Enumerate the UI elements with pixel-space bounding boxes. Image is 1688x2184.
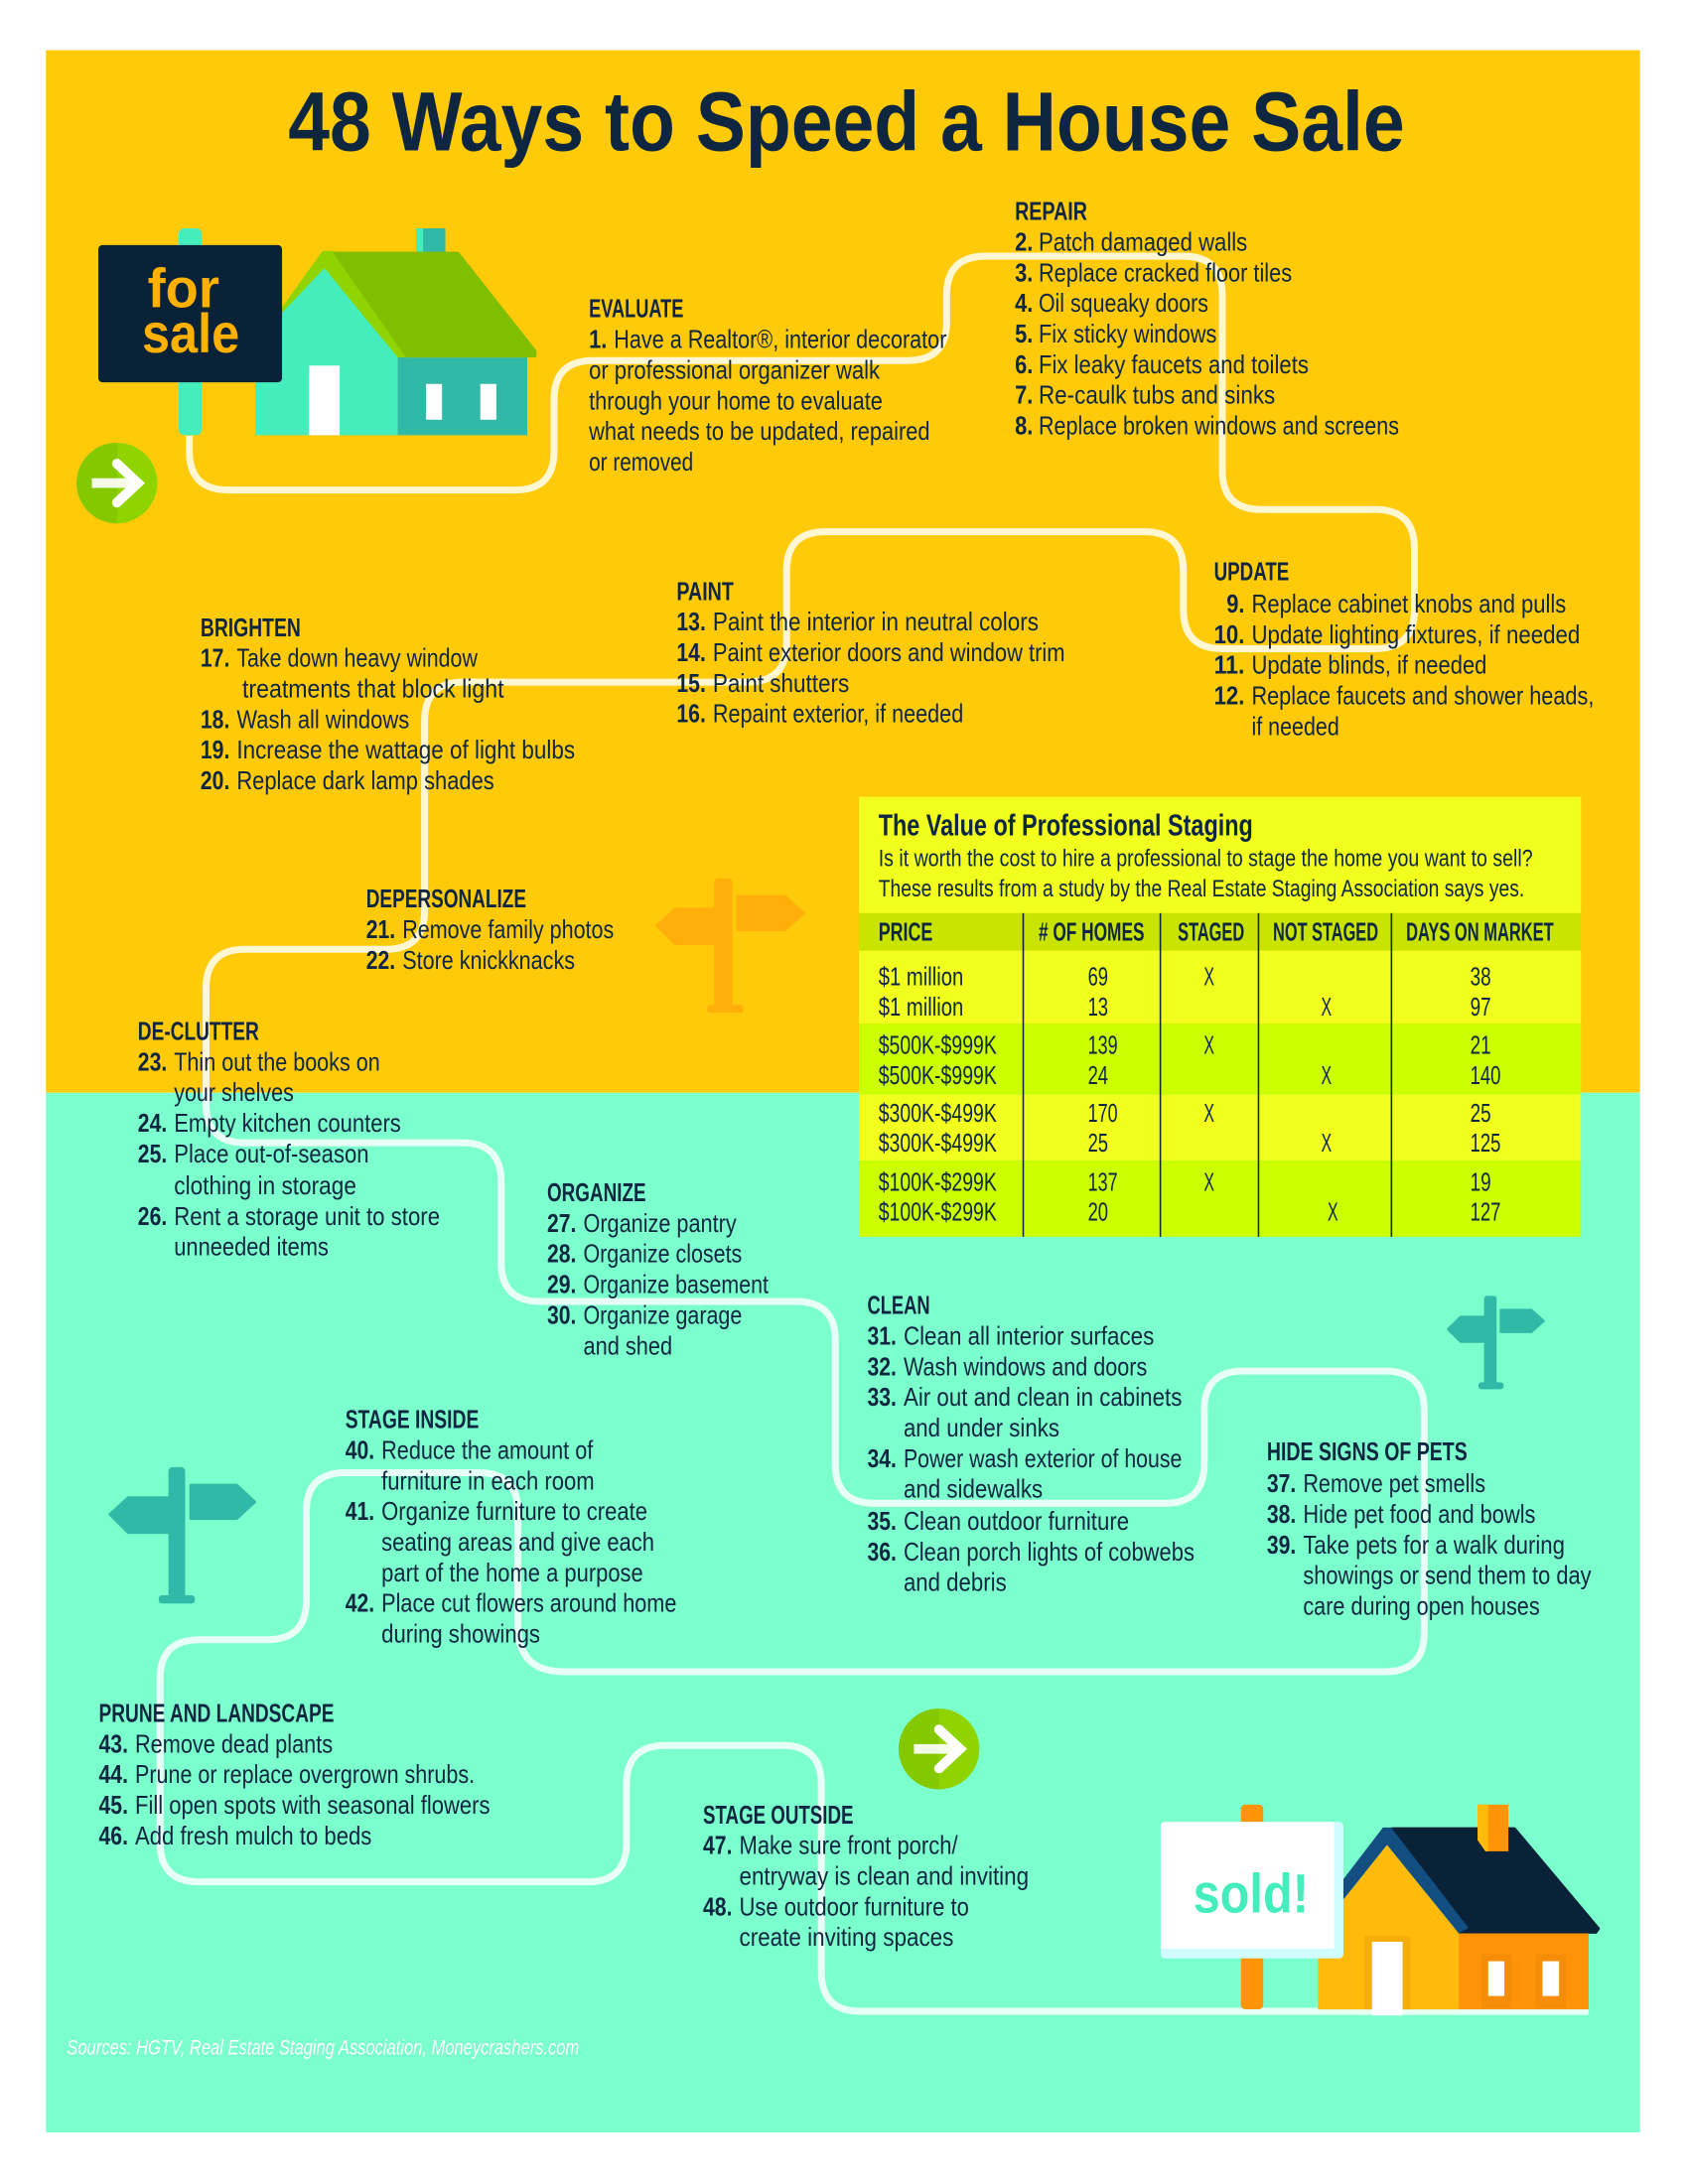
section: de-clutter: Place out-of-season (174, 1141, 369, 1168)
section: paint: Paint the interior in neutral colors (713, 609, 1039, 636)
section: update: 10. (1214, 621, 1244, 649)
section: prune and landscape (99, 1700, 491, 1850)
for sale sign: for (148, 256, 219, 319)
section: stage inside: 42. (346, 1590, 374, 1618)
panel: staging table: 20 (1088, 1198, 1108, 1226)
section: clean: Air out and clean in cabinets (904, 1384, 1182, 1412)
section: repair: Fix leaky faucets and toilets (1039, 351, 1309, 379)
section: stage outside: Use outdoor furniture to (739, 1893, 969, 1921)
section: prune and landscape: 45. (99, 1792, 128, 1820)
panel: staging table: X (1322, 994, 1332, 1022)
section: depersonalize: Store knickknacks (402, 947, 575, 975)
background: yellow upper panel (46, 51, 1640, 1093)
section: repair: Oil squeaky doors (1039, 290, 1208, 318)
section: clean: 31. (867, 1322, 897, 1350)
section: organize: 30. (547, 1301, 576, 1329)
section: stage inside: Reduce the amount of (381, 1436, 594, 1464)
section: hide signs of pets (1267, 1438, 1592, 1620)
section: repair: Patch damaged walls (1039, 228, 1247, 256)
panel: staging table: These results from a study by the Real Estate Staging Association says yes. (879, 876, 1524, 902)
section: brighten: 20. (201, 767, 229, 795)
section: prune and landscape: 44. (99, 1761, 128, 1789)
section: update: UPDATE (1214, 559, 1289, 587)
panel: staging table: X (1203, 1031, 1214, 1059)
section: de-clutter: Empty kitchen counters (174, 1110, 401, 1138)
panel: staging table: X (1322, 1062, 1332, 1090)
section: update: 12. (1214, 683, 1244, 711)
section: de-clutter: your shelves (174, 1079, 294, 1107)
section: organize: 28. (547, 1241, 576, 1269)
section: paint: 16. (676, 701, 706, 729)
panel: staging table: 139 (1088, 1031, 1118, 1059)
section: hide signs of pets: Remove pet smells (1303, 1470, 1485, 1498)
background: mint lower panel (46, 1093, 1640, 2132)
section: hide signs of pets: showings or send them to day (1303, 1563, 1592, 1590)
section: evaluate: what needs to be updated, repaired (588, 418, 930, 446)
section: clean: and under sinks (904, 1415, 1059, 1442)
panel: staging table: # OF HOMES (1039, 918, 1144, 946)
section: repair: 7. (1015, 382, 1033, 410)
section: stage inside (346, 1407, 676, 1649)
section: evaluate: 1. (589, 327, 607, 354)
panel: staging table: 170 (1088, 1100, 1118, 1128)
section: brighten: BRIGHTEN (201, 614, 301, 642)
section: repair: 4. (1015, 290, 1033, 318)
section: prune and landscape: PRUNE AND LANDSCAPE (99, 1700, 334, 1727)
panel: staging table: 13 (1088, 994, 1108, 1022)
section: hide signs of pets: 37. (1267, 1470, 1296, 1498)
panel: staging table: The Value of Professional Staging (879, 808, 1253, 843)
section: paint: 15. (676, 670, 706, 698)
panel: staging table: X (1203, 964, 1214, 992)
panel: staging table: $300K-$499K (879, 1100, 997, 1128)
section: brighten: Take down heavy window (236, 645, 478, 673)
for sale house (255, 228, 535, 435)
section: hide signs of pets: Hide pet food and bowls (1303, 1501, 1535, 1529)
section: update: 11. (1214, 652, 1244, 680)
section: clean: Power wash exterior of house (904, 1445, 1182, 1473)
section: organize: ORGANIZE (547, 1179, 646, 1207)
section: paint: 14. (676, 639, 706, 667)
panel: staging table: $1 million (879, 994, 963, 1022)
section: prune and landscape: Prune or replace overgrown shrubs. (135, 1761, 475, 1789)
section: clean: CLEAN (867, 1293, 930, 1320)
section: update: if needed (1251, 713, 1339, 741)
section: update: Replace faucets and shower heads, (1251, 683, 1594, 711)
section: stage outside: 48. (703, 1893, 732, 1921)
section: stage inside: STAGE INSIDE (346, 1407, 479, 1434)
section: brighten: Increase the wattage of light bulbs (236, 737, 575, 764)
section: clean: 33. (867, 1384, 897, 1412)
section: organize: 29. (547, 1272, 576, 1299)
section: evaluate: or removed (589, 449, 693, 477)
section: repair: 8. (1015, 413, 1033, 441)
section: de-clutter: clothing in storage (174, 1172, 356, 1200)
section: prune and landscape: 43. (99, 1730, 128, 1758)
section: organize: and shed (583, 1332, 672, 1360)
section: organize: Organize closets (583, 1241, 742, 1269)
section: repair: 6. (1015, 351, 1033, 379)
section: paint: 13. (676, 609, 706, 636)
section: prune and landscape: 46. (99, 1823, 128, 1850)
section: brighten: 19. (201, 737, 229, 764)
section: de-clutter: Thin out the books on (174, 1048, 380, 1076)
sold sign: sold! (1194, 1862, 1309, 1925)
section: de-clutter (138, 1018, 440, 1262)
winding path (160, 256, 1589, 2011)
panel: staging table: 97 (1471, 994, 1491, 1022)
section: organize: Organize basement (583, 1272, 770, 1299)
section: stage inside: part of the home a purpose (381, 1560, 643, 1587)
panel: staging table: 24 (1088, 1062, 1108, 1090)
section: paint (676, 578, 1065, 729)
panel: staging table: NOT STAGED (1273, 918, 1378, 946)
section: de-clutter: 23. (138, 1048, 167, 1076)
section: clean: 32. (867, 1353, 897, 1381)
section: organize: Organize pantry (583, 1210, 737, 1238)
section: stage outside: STAGE OUTSIDE (703, 1802, 853, 1830)
section: update (1214, 559, 1594, 741)
panel: staging table: DAYS ON MARKET (1406, 918, 1554, 946)
panel: staging table: STAGED (1178, 918, 1244, 946)
section: hide signs of pets: care during open houses (1303, 1592, 1540, 1620)
for sale sign (98, 228, 282, 435)
section: stage outside: 47. (703, 1833, 732, 1860)
section: stage inside: furniture in each room (381, 1467, 595, 1495)
panel: staging table: $100K-$299K (879, 1168, 997, 1196)
section: stage inside: seating areas and give each (381, 1529, 654, 1557)
panel: staging table: $100K-$299K (879, 1198, 997, 1226)
section: depersonalize: 21. (366, 916, 395, 944)
section: stage outside: entryway is clean and inviting (739, 1862, 1029, 1890)
sold sign (1161, 1805, 1343, 2009)
for sale sign: sale (142, 302, 239, 364)
panel: staging table: 21 (1471, 1031, 1491, 1059)
section: update: 9. (1226, 591, 1244, 618)
panel: staging table: X (1328, 1198, 1338, 1226)
section: organize: 27. (547, 1210, 576, 1238)
section: evaluate: EVALUATE (589, 296, 683, 324)
signpost: teal left (110, 1467, 255, 1603)
section: organize: Organize garage (583, 1301, 742, 1329)
section: clean: Clean all interior surfaces (904, 1322, 1154, 1350)
panel: staging table: $500K-$999K (879, 1031, 997, 1059)
section: stage outside: Make sure front porch/ (739, 1833, 958, 1860)
sold house (1318, 1805, 1599, 2015)
section: de-clutter: 26. (138, 1203, 167, 1231)
section: de-clutter: 24. (138, 1110, 167, 1138)
section: paint: Paint exterior doors and window trim (713, 639, 1065, 667)
section: clean: Wash windows and doors (904, 1353, 1147, 1381)
section: de-clutter: 25. (138, 1141, 167, 1168)
section: de-clutter: Rent a storage unit to store (174, 1203, 440, 1231)
section: brighten: 18. (201, 706, 229, 734)
section: clean: and debris (904, 1570, 1007, 1597)
panel: staging table: 127 (1471, 1198, 1500, 1226)
section: hide signs of pets: Take pets for a walk during (1303, 1532, 1565, 1560)
section: depersonalize: DEPERSONALIZE (366, 886, 526, 913)
section: update: Update blinds, if needed (1251, 652, 1486, 680)
section: prune and landscape: Remove dead plants (135, 1730, 333, 1758)
panel: staging table: 69 (1088, 964, 1108, 992)
section: depersonalize: 22. (366, 947, 395, 975)
panel: staging table: X (1322, 1130, 1332, 1158)
section: clean (867, 1293, 1195, 1597)
section: clean: and sidewalks (904, 1476, 1043, 1504)
section: repair: REPAIR (1015, 199, 1087, 226)
section: hide signs of pets: HIDE SIGNS OF PETS (1267, 1438, 1468, 1466)
panel: staging table: X (1203, 1168, 1214, 1196)
panel: staging table: 19 (1471, 1168, 1491, 1196)
panel: staging table: 137 (1088, 1168, 1118, 1196)
section: de-clutter: unneeded items (174, 1234, 329, 1262)
panel: staging table: 25 (1088, 1130, 1108, 1158)
panel: staging table: X (1203, 1100, 1214, 1128)
section: repair: 5. (1015, 321, 1033, 348)
section: repair (1015, 199, 1399, 441)
section: clean: 36. (867, 1539, 897, 1567)
panel: staging table: $1 million (879, 964, 963, 992)
section: brighten: Replace dark lamp shades (236, 767, 494, 795)
section: repair: 2. (1015, 228, 1033, 256)
section: organize (547, 1179, 770, 1360)
section: stage outside (703, 1802, 1029, 1952)
section: repair: Re-caulk tubs and sinks (1039, 382, 1275, 410)
section: brighten: treatments that block light (242, 676, 504, 704)
panel: staging table: 25 (1471, 1100, 1491, 1128)
section: repair: Replace broken windows and screens (1039, 413, 1399, 441)
panel: staging table: $500K-$999K (879, 1062, 997, 1090)
section: update: Replace cabinet knobs and pulls (1251, 591, 1566, 618)
section: evaluate: through your home to evaluate (589, 387, 883, 415)
panel: staging table: PRICE (879, 918, 932, 946)
section: brighten: 17. (201, 645, 229, 673)
section: repair: 3. (1015, 259, 1033, 287)
icon: arrow finish (899, 1708, 979, 1789)
section: hide signs of pets: 38. (1267, 1501, 1296, 1529)
section: clean: Clean outdoor furniture (904, 1508, 1129, 1536)
section: paint: Paint shutters (713, 670, 849, 698)
panel: staging table: 38 (1471, 964, 1491, 992)
icon: arrow start (76, 443, 157, 523)
signpost: orange (657, 879, 803, 1013)
section: clean: Clean porch lights of cobwebs (904, 1539, 1195, 1567)
section: stage inside: Organize furniture to create (381, 1498, 647, 1526)
section: paint: Repaint exterior, if needed (713, 701, 963, 729)
title: 48 Ways to Speed a House Sale (288, 74, 1405, 169)
section: update: Update lighting fixtures, if needed (1251, 621, 1580, 649)
section: hide signs of pets: 39. (1267, 1532, 1296, 1560)
section: prune and landscape: Add fresh mulch to beds (135, 1823, 371, 1850)
signpost: teal right (1448, 1296, 1544, 1389)
section: evaluate (588, 296, 947, 477)
sources note: Sources: HGTV, Real Estate Staging Association, Moneycrashers.com (67, 2037, 579, 2060)
section: brighten (201, 614, 575, 795)
section: depersonalize (366, 886, 614, 975)
section: paint: PAINT (676, 578, 734, 606)
section: evaluate: or professional organizer walk (589, 356, 880, 384)
section: prune and landscape: Fill open spots with seasonal flowers (135, 1792, 491, 1820)
section: clean: 35. (867, 1508, 897, 1536)
panel: staging table: Is it worth the cost to hire a professional to stage the home you want to sell? (879, 846, 1533, 873)
panel: staging table: 125 (1471, 1130, 1500, 1158)
section: stage inside: during showings (381, 1621, 540, 1649)
section: de-clutter: DE-CLUTTER (138, 1018, 259, 1045)
section: repair: Replace cracked floor tiles (1039, 259, 1292, 287)
panel: staging table (859, 797, 1581, 1237)
section: stage outside: create inviting spaces (739, 1924, 953, 1952)
section: repair: Fix sticky windows (1039, 321, 1216, 348)
section: stage inside: Place cut flowers around home (381, 1590, 676, 1618)
section: clean: 34. (867, 1445, 897, 1473)
section: depersonalize: Remove family photos (402, 916, 614, 944)
section: evaluate: Have a Realtor®, interior decorator (614, 327, 947, 354)
panel: staging table: $300K-$499K (879, 1130, 997, 1158)
section: stage inside: 40. (346, 1436, 374, 1464)
section: brighten: Wash all windows (236, 706, 409, 734)
section: stage inside: 41. (346, 1498, 374, 1526)
panel: staging table: 140 (1471, 1062, 1500, 1090)
